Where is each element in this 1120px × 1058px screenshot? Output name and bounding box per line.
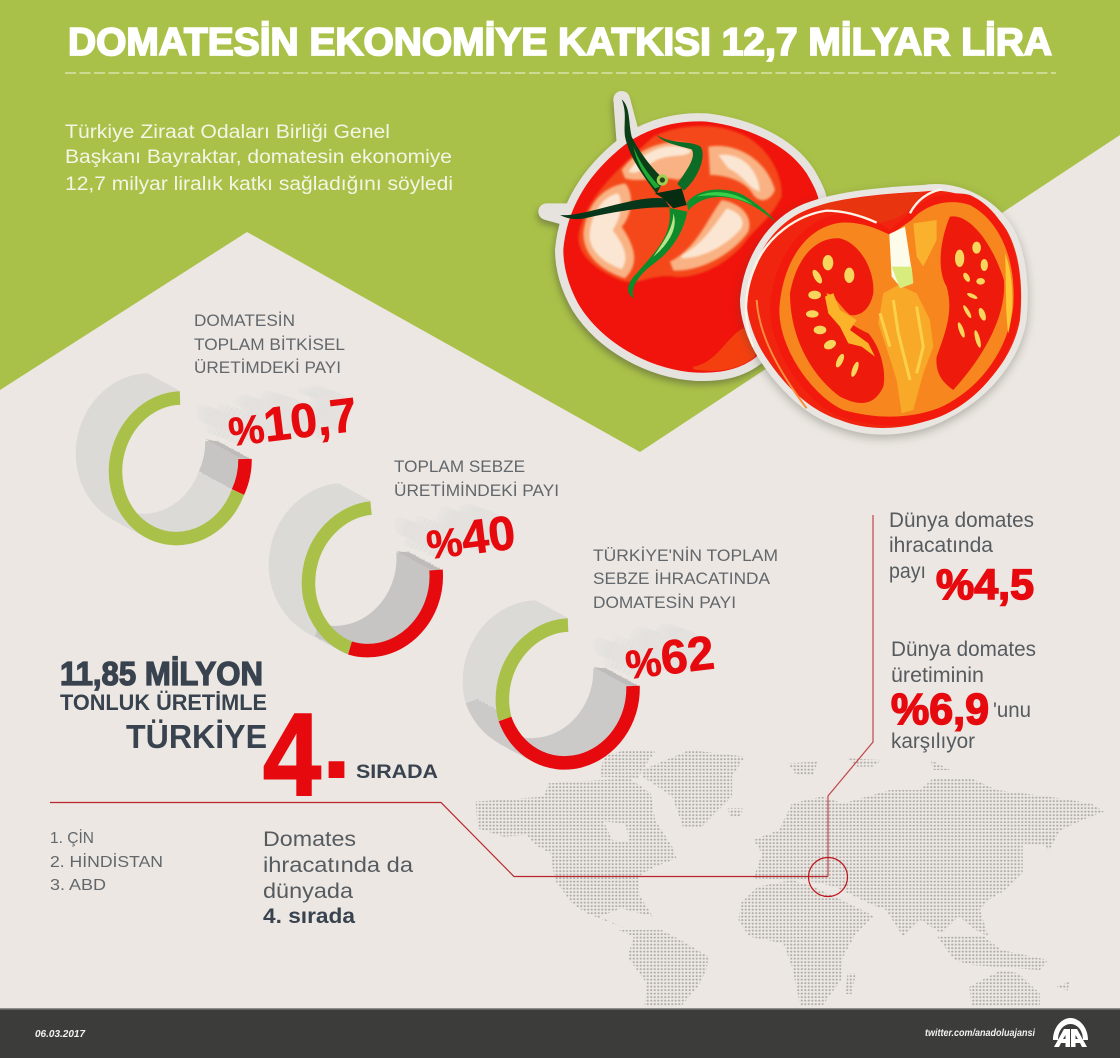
big red rank number: . [321,677,352,802]
production headline [60,655,438,820]
world production share: Dünya domates [891,638,1036,661]
top producers list: 1. ÇİN [50,828,94,847]
export rank text: 4. sırada [263,905,355,928]
footer bar [0,1008,1120,1058]
percent value: 10,7: %10,7 [226,389,360,455]
label: share of vegetable exports: SEBZE İHRACATINDA [593,569,770,588]
export rank text: dünyada [263,880,353,903]
top producers list: 2. HİNDİSTAN [50,852,163,871]
connector lines and location circle [50,515,873,896]
title: DOMATESİN EKONOMİYE KATKISI 12,7 MİLYAR LİRA [68,21,1052,64]
world production share: karşılıyor [891,730,975,753]
production headline: SIRADA [356,761,438,783]
production headline: TONLUK ÜRETİMLE [60,690,267,715]
ring 1: 10,7 percent [82,373,252,539]
world export share: payı [889,560,926,583]
stem and sepals [560,99,775,298]
world export share: ihracatında [889,534,993,557]
intro text: 12,7 milyar liralık katkı sağladığını söyledi [65,174,453,195]
label: share of vegetable exports: TÜRKİYE'NİN TOPLAM [593,546,778,565]
green background band [0,0,1120,452]
export rank text: ihracatında da [263,854,413,877]
intro text: Başkanı Bayraktar, domatesin ekonomiye [65,147,452,168]
world export share: Dünya domates [889,509,1034,532]
intro text [65,122,453,195]
big red rank number: 4 [263,689,321,820]
world production share: üretiminin [891,664,984,687]
footer date: 06.03.2017 [35,1029,85,1040]
ring 2: 40 percent [276,483,443,651]
production headline: TÜRKİYE [126,718,267,755]
label: share of crop production [194,311,345,377]
world production share: 'unu [993,699,1031,722]
export rank text: Domates [263,828,356,851]
world production share: %6,9 [891,685,989,734]
label: share of crop production: DOMATESİN [194,311,295,330]
percent value: 40: %40 [424,507,518,568]
label: share of vegetable production: TOPLAM SEBZE [394,458,525,476]
footer social handle: twitter.com/anadoluajansi [925,1027,1036,1039]
big red rank number [263,677,352,820]
whole tomato [547,99,819,373]
halved tomato [746,189,1021,428]
production headline: 11,85 MİLYON [60,655,263,692]
world export share: %4,5 [936,561,1034,609]
intro text: Türkiye Ziraat Odaları Birliği Genel [65,122,390,143]
world dot map [476,750,1104,1007]
icon: agency logo [1053,1018,1088,1047]
label: share of vegetable production: ÜRETİMİNDEKİ PAYI [394,481,559,500]
label: share of vegetable exports: DOMATESİN PAYI [593,593,736,612]
world production share [891,638,1036,753]
label: share of vegetable exports [593,546,778,612]
top producers list: 3. ABD [50,877,106,894]
top producers list [50,828,163,894]
world export share [889,509,1034,609]
ring 3: 62 percent [469,600,640,763]
export rank text [263,828,413,928]
label: share of crop production: TOPLAM BİTKİSEL [194,335,345,354]
illustration: tomatoes [547,99,1021,428]
label: share of vegetable production [394,458,559,500]
title dashed rule [65,72,1056,74]
label: share of crop production: ÜRETİMDEKİ PAYI [194,358,341,377]
percent value: 62: %62 [623,627,717,688]
